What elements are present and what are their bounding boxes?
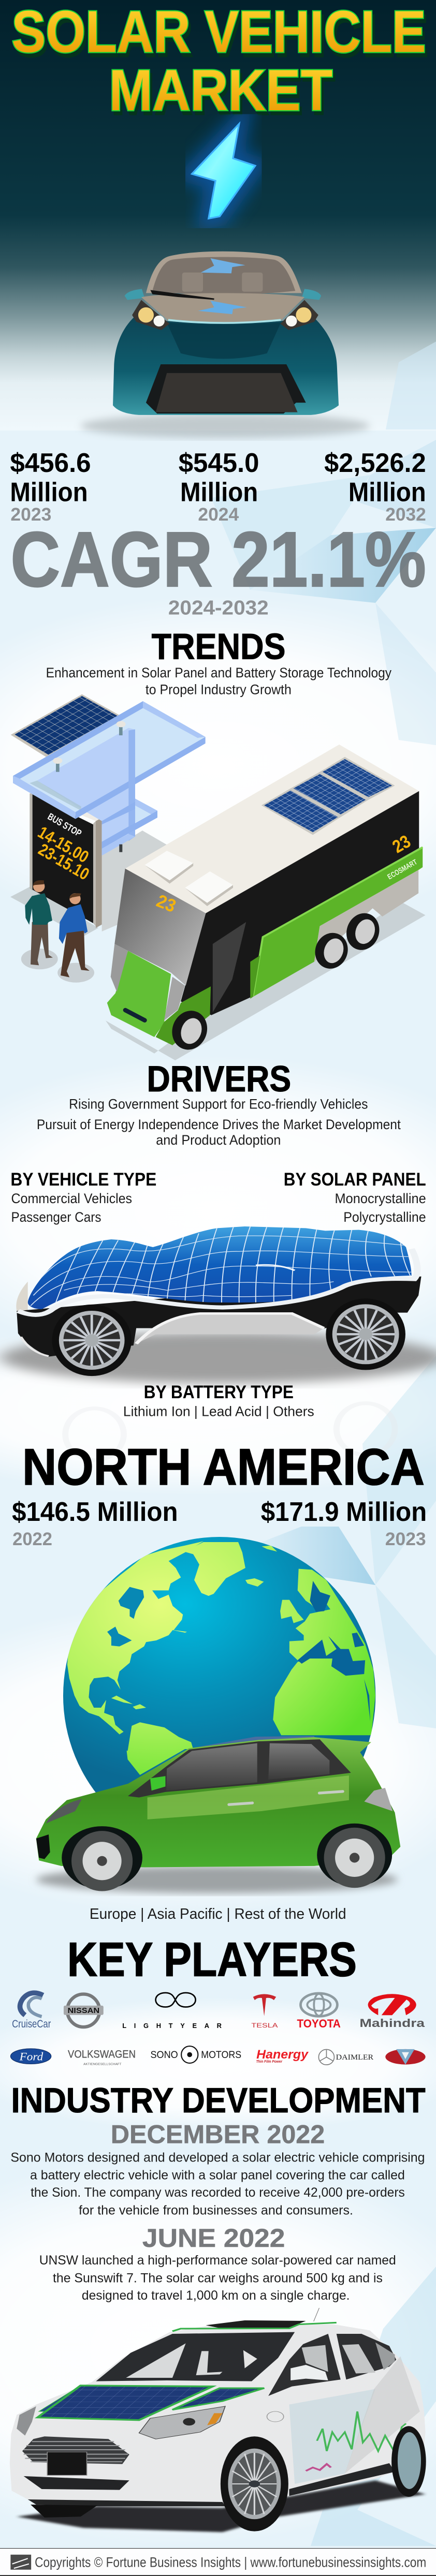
logo: Mahindra — [359, 1994, 425, 2030]
segment: by solar panel: Polycrystalline — [343, 1209, 426, 1225]
heading: drivers: Rising Government Support for Eco-friendly Vehicles — [69, 1097, 368, 1112]
illustration: green solar bus: 23 — [389, 831, 414, 857]
development: december 2022: a battery electric vehicle with a solar panel covering the car called — [30, 2168, 405, 2182]
segment: by vehicle type: Passenger Cars — [11, 1209, 101, 1225]
illustration: green solar bus: 23 — [154, 891, 179, 916]
heading: drivers: and Product Adoption — [156, 1132, 281, 1148]
solar surface with grid — [25, 1226, 414, 1311]
logo: Volkswagen — [68, 2048, 136, 2066]
stat: 2032 value: 2032 — [385, 505, 426, 525]
stat: 2032 value: Million — [348, 478, 426, 508]
region: north america: 2022 — [12, 1529, 52, 1549]
logo: Sono Motors: SONO — [151, 2050, 178, 2061]
logo: Tesla — [251, 1994, 279, 2029]
logo: Hanergy: Hanergy — [256, 2048, 309, 2062]
title: MARKET — [109, 58, 332, 123]
stat: 2024 value: $545.0 — [179, 448, 259, 478]
region: north america — [12, 1439, 427, 1549]
icon: lightning bolt — [192, 124, 255, 218]
segment: by solar panel: Monocrystalline — [335, 1191, 426, 1206]
development: december 2022: Sono Motors designed and developed a solar electric vehicle comprising — [10, 2151, 425, 2165]
development: june 2022: designed to travel 1,000 km on a single charge. — [82, 2288, 350, 2303]
heading: trends: to Propel Industry Growth — [146, 682, 292, 697]
segment: by solar panel — [284, 1169, 426, 1225]
logo: Venturi — [385, 2049, 426, 2065]
logo: Sono Motors — [151, 2046, 241, 2063]
stat: 2023 value: Million — [10, 478, 88, 508]
illustration: solar bus stop — [10, 694, 206, 937]
logo: Volkswagen: AKTIENGESELLSCHAFT — [83, 2063, 122, 2066]
logo: Toyota — [297, 1993, 341, 2030]
logo: Daimler: DAIMLER — [336, 2053, 373, 2062]
segment: by battery type — [123, 1382, 314, 1419]
segment: by battery type: BY BATTERY TYPE — [144, 1382, 294, 1402]
logo: Lightyear — [122, 1993, 229, 2030]
segment: by vehicle type: BY VEHICLE TYPE — [10, 1169, 156, 1190]
region: north america: 2023 — [385, 1529, 426, 1549]
illustration: solar bus stop: 23-15.10 — [35, 839, 93, 884]
CAGR figure: 2024-2032 — [168, 597, 269, 619]
logo: Hanergy: Thin Film Power — [256, 2060, 283, 2064]
footer bar — [0, 2548, 436, 2576]
segment: by vehicle type — [10, 1169, 156, 1225]
logo: Tesla: TESLA — [251, 2022, 279, 2029]
stat: 2023 value: 2023 — [10, 505, 51, 525]
logo: Nissan: NISSAN — [67, 2006, 99, 2015]
region: north america: $146.5 Million — [12, 1497, 178, 1527]
logo: Lightyear: LIGHTYEAR — [122, 2022, 229, 2030]
development: december 2022: for the vehicle from businesses and consumers. — [79, 2203, 353, 2218]
illustration: globe — [63, 1537, 376, 1793]
heading: drivers — [37, 1058, 401, 1148]
illustration: green solar car — [36, 1736, 400, 1893]
region: north america: $171.9 Million — [261, 1497, 427, 1527]
illustration: solar covered car — [0, 1226, 436, 1460]
logo: Ford: Ford — [19, 2050, 43, 2063]
wheel: front — [52, 1305, 132, 1376]
development: june 2022: the Sunswift 7. The solar car weighs around 500 kg and is — [53, 2271, 383, 2285]
logo: Daimler — [318, 2049, 373, 2065]
illustration: white solar car — [10, 2308, 426, 2532]
icon: fortune business insights logo — [10, 2555, 31, 2570]
illustration: solar bus stop: 14-15.00 — [35, 822, 92, 866]
stat: 2032 value — [324, 448, 426, 525]
logo: Volkswagen: VOLKSWAGEN — [68, 2048, 136, 2060]
illustration: solar bus stop: BUS STOP — [46, 811, 83, 839]
logo: Ford — [10, 2049, 51, 2064]
title: MARKET — [111, 62, 335, 127]
other regions list: Europe | Asia Pacific | Rest of the World — [90, 1906, 346, 1922]
title — [12, 0, 428, 127]
development: june 2022 — [39, 2224, 396, 2303]
heading: trends — [46, 626, 392, 697]
stat: 2023 value — [10, 448, 91, 525]
heading: trends: Enhancement in Solar Panel and Battery Storage Technology — [46, 665, 392, 680]
logo: Mahindra: Mahindra — [359, 2017, 425, 2030]
stat: 2024 value: 2024 — [198, 505, 239, 525]
stat: 2024 value: Million — [180, 478, 258, 508]
development: december 2022: DECEMBER 2022 — [111, 2120, 325, 2149]
heading: trends: TRENDS — [152, 626, 285, 667]
wheel: rear — [326, 1298, 405, 1370]
illustration: green solar bus: ECOSMART — [386, 858, 419, 881]
illustration: two men waiting — [21, 880, 94, 983]
logo: CruiseCar: CruiseCar — [12, 2018, 51, 2030]
heading: drivers: Pursuit of Energy Independence Drives the Market Development — [37, 1117, 401, 1132]
development: june 2022: JUNE 2022 — [142, 2224, 285, 2253]
logo: Nissan — [64, 1994, 104, 2027]
heading: drivers: DRIVERS — [147, 1058, 291, 1100]
logo: Toyota: TOYOTA — [297, 2017, 341, 2030]
stat: 2032 value: $2,526.2 — [324, 448, 426, 478]
development: december 2022 — [10, 2120, 425, 2218]
logo: CruiseCar — [12, 1993, 51, 2030]
illustration: green solar bus — [106, 745, 426, 1060]
segment: by battery type: Lithium Ion | Lead Acid | Others — [123, 1404, 314, 1419]
development: june 2022: UNSW launched a high-performance solar-powered car named — [39, 2253, 396, 2268]
hero dark background — [0, 0, 436, 431]
segment: by vehicle type: Commercial Vehicles — [11, 1191, 132, 1206]
stat: 2024 value — [179, 448, 259, 525]
stat: 2023 value: $456.6 — [10, 448, 91, 478]
hero car front view — [81, 251, 370, 438]
heading: key players: KEY PLAYERS — [67, 1933, 357, 1986]
development: december 2022: the Sion. The company was recorded to receive 42,000 pre-orders — [31, 2185, 405, 2200]
logo: Sono Motors: MOTORS — [201, 2050, 241, 2061]
